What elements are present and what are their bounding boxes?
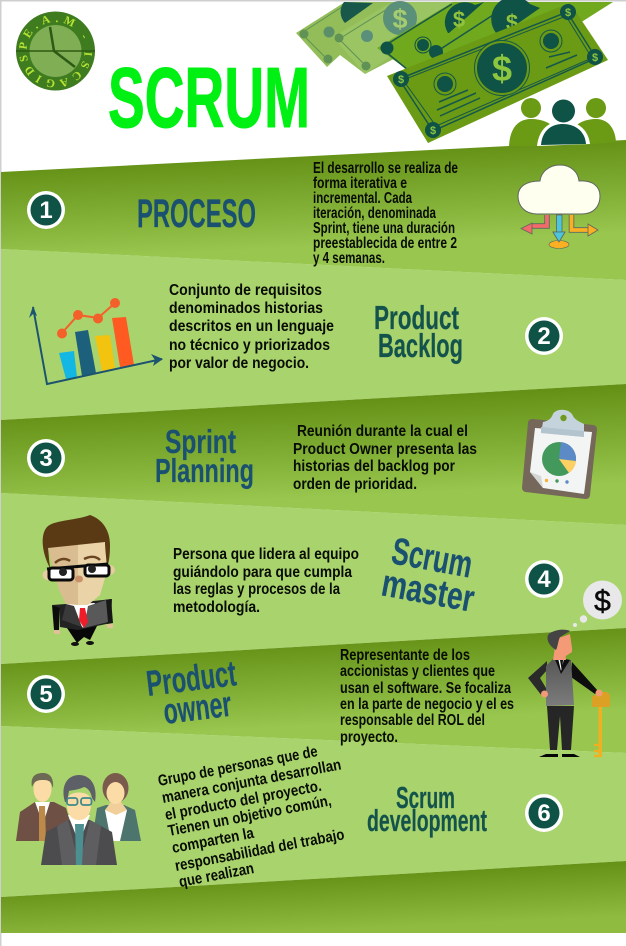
text block: proceso: incremental. Cada — [313, 190, 412, 207]
badge: 4: 4 — [537, 566, 551, 593]
text block: sprint planning: historias del backlog por — [293, 458, 455, 475]
text block: product backlog: no técnico y priorizados — [169, 337, 330, 354]
text block: product owner: responsable del ROL del — [340, 712, 485, 729]
heading: product owner — [144, 652, 238, 732]
badge: 6 — [525, 794, 563, 832]
text block: product owner — [340, 647, 514, 746]
heading: scrum master — [378, 531, 478, 621]
title: SCRUM — [108, 51, 310, 146]
icon: banknotes: $ — [430, 125, 436, 137]
badge: 5: 5 — [39, 681, 53, 708]
text block: scrum development: comparten la — [171, 825, 256, 857]
icon: banknotes: $ — [592, 52, 598, 64]
text block: proceso: preestablecida de entre 2 — [313, 235, 457, 252]
badge: 1: 1 — [39, 197, 53, 224]
badge: 2 — [525, 317, 563, 355]
text block: product owner: accionistas y clientes que — [340, 663, 495, 680]
text block: product owner: proyecto. — [340, 729, 398, 746]
text block: proceso: forma iterativa e — [313, 175, 407, 192]
text block: product owner: Representante de los — [340, 647, 470, 664]
icon: banknotes: $ — [392, 4, 408, 34]
badge: 3: 3 — [39, 445, 53, 472]
icon: cloud with arrows — [518, 165, 600, 248]
icon: banknotes — [296, 0, 613, 143]
badge: 2: 2 — [537, 323, 551, 350]
icon: scrum master character — [42, 515, 115, 646]
text block: sprint planning — [293, 423, 477, 493]
heading: sprint planning — [155, 423, 254, 489]
text block: product backlog: Conjunto de requisitos — [169, 282, 322, 299]
icon: businessman with key — [528, 630, 612, 757]
heading: scrum development: development — [367, 803, 487, 838]
icon: banknotes: $ — [565, 7, 571, 19]
heading: product backlog: Product — [374, 299, 459, 336]
text block: proceso: iteración, denominada — [313, 205, 436, 222]
text block: proceso: El desarrollo se realiza de — [313, 160, 458, 177]
text block: scrum master: las reglas y procesos de la — [173, 581, 340, 598]
badge: 3 — [27, 439, 65, 477]
icon: banknotes: $ — [506, 10, 518, 35]
text block: scrum development: manera conjunta desarrollan — [161, 756, 343, 807]
text block: scrum master: metodología. — [173, 599, 260, 616]
heading: proceso: PROCESO — [137, 192, 256, 236]
text block: scrum master: guiándolo para que cumpla — [173, 564, 352, 581]
text block: scrum master: Persona que lidera al equipo — [173, 546, 359, 563]
text block: proceso: Sprint, tiene una duración — [313, 220, 455, 237]
text block: sprint planning: Reunión durante la cual el — [297, 423, 468, 440]
icon: people group — [509, 98, 616, 146]
text block: sprint planning: orden de prioridad. — [293, 476, 417, 493]
heading: scrum development — [367, 780, 487, 838]
heading: scrum master: master — [378, 563, 478, 621]
heading: product owner: owner — [161, 683, 233, 732]
heading: product backlog — [374, 299, 463, 364]
icon: thought bubble with dollar: $ — [594, 585, 611, 618]
heading: product backlog: Backlog — [378, 327, 463, 364]
icon: thought bubble with dollar — [573, 580, 622, 627]
text block: scrum development: Grupo de personas que de — [157, 743, 319, 790]
text block: sprint planning: Product Owner presenta las — [293, 441, 477, 458]
text block: product backlog: descritos en un lenguaje — [169, 318, 334, 335]
text block: scrum development: Tienen un objetivo común, — [167, 792, 333, 840]
text block: scrum development: que realizan — [178, 860, 255, 891]
text block: product backlog: por valor de negocio. — [169, 355, 309, 372]
text block: proceso — [313, 160, 458, 267]
icon: logo medallion: GIDSPE.A.M - ISCA — [19, 16, 92, 88]
text block: product backlog: denominados historias — [169, 300, 323, 317]
icon: banknotes: $ — [492, 48, 512, 89]
badge: 5 — [27, 675, 65, 713]
text block: product backlog — [169, 282, 334, 372]
icon: banknotes: $ — [453, 7, 465, 32]
heading: product owner: Product — [144, 652, 238, 704]
text block: proceso: y 4 semanas. — [313, 250, 385, 267]
heading: sprint planning: Planning — [155, 452, 254, 489]
heading: sprint planning: Sprint — [165, 423, 236, 460]
icon: banknotes: $ — [398, 74, 404, 86]
heading: scrum development: Scrum — [396, 780, 455, 815]
badge: 4 — [525, 560, 563, 598]
heading: scrum master: Scrum — [388, 531, 476, 587]
text block: product owner: usan el software. Se focaliza — [340, 680, 511, 697]
text block: product owner: en la parte de negocio y el es — [340, 696, 514, 713]
icon: team of three — [16, 773, 141, 865]
text block: scrum development: responsabilidad del trabajo — [174, 826, 346, 875]
icon: bar and line chart — [29, 298, 163, 384]
badge: 1 — [27, 191, 65, 229]
badge: 6: 6 — [537, 800, 551, 827]
text block: scrum development — [157, 743, 346, 891]
text block: scrum master — [173, 546, 359, 616]
icon: clipboard with pie chart — [526, 410, 593, 495]
text block: scrum development: el producto del proyecto. — [164, 778, 323, 824]
